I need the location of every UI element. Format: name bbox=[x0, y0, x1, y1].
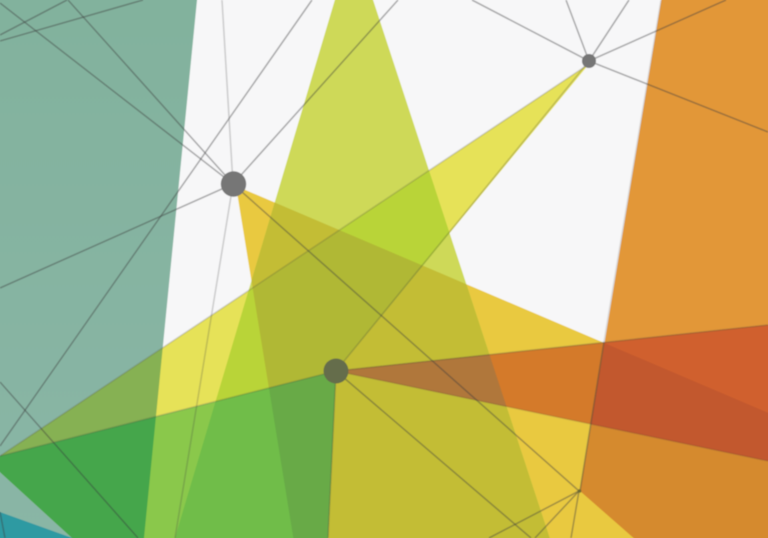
shape: red wedge bbox=[336, 324, 768, 463]
corner: blue wedge bbox=[0, 508, 100, 538]
shape: gold triangle bbox=[236, 186, 768, 538]
node: large grey bbox=[221, 171, 246, 197]
panel: orange band bbox=[580, 0, 768, 538]
node: tiny lower right bbox=[578, 489, 581, 493]
shape: pale yellow triangle bbox=[0, 64, 589, 463]
node: small grey top right bbox=[582, 54, 596, 68]
node: olive centre bbox=[324, 358, 348, 384]
shape: green quadrilateral bbox=[0, 371, 336, 538]
panel: teal band bbox=[0, 0, 198, 538]
shape: lime triangle bbox=[248, 0, 550, 538]
